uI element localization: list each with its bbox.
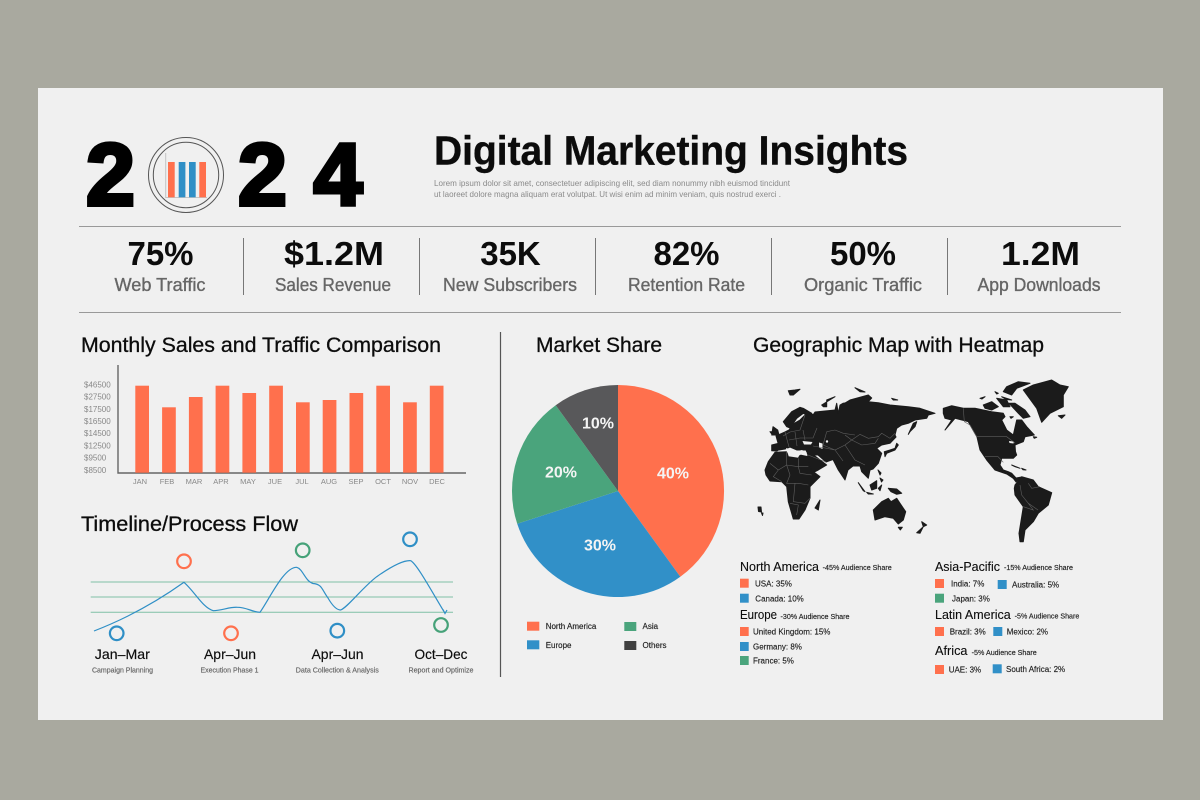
- map legend: Africa: Africa: [935, 644, 968, 658]
- KPI: organic traffic: [804, 235, 922, 295]
- phase 2 label: Execution Phase 1: [200, 668, 259, 674]
- bar chart: $12500: [84, 441, 111, 450]
- map legend: Africa: UAE: 3%: [949, 665, 981, 674]
- country borders: Eurasia: [783, 415, 895, 465]
- bar chart: [84, 365, 466, 486]
- pie chart: 30%: [584, 538, 616, 554]
- KPI: new subscribers: [443, 235, 577, 295]
- slice: North America 40%: [618, 385, 724, 577]
- bar chart: $14500: [84, 429, 111, 438]
- Arabia: [808, 455, 827, 473]
- bar chart: APR: [213, 477, 229, 486]
- map legend: Africa: [935, 644, 1065, 674]
- New Zealand and Tasmania: [898, 522, 927, 533]
- KPI: organic traffic: Organic Traffic: [804, 275, 922, 295]
- timeline chart: [91, 532, 474, 674]
- Scandinavia: [783, 407, 812, 428]
- heading: market share: Market Share: [536, 334, 662, 357]
- KPI: app downloads: App Downloads: [978, 275, 1100, 295]
- title: Digital Marketing Insights: [434, 128, 908, 174]
- slice: Europe 30%: [517, 491, 680, 597]
- Eurasia: [776, 395, 935, 480]
- heading: monthly sales: Monthly Sales and Traffic Comparison: [81, 334, 441, 357]
- KPI: sales revenue: [275, 235, 391, 295]
- timeline markers: [110, 532, 448, 640]
- icon: circled bar chart: [148, 138, 224, 212]
- map legend: Latin America: Latin America: [935, 608, 1011, 622]
- inland seas: [786, 440, 1014, 456]
- year heading 2024: 4: [314, 125, 362, 224]
- pie legend: Asia: [642, 622, 659, 631]
- heading: geographic map: Geographic Map with Heatmap: [753, 334, 1044, 357]
- KPI: web traffic: 75%: [127, 235, 194, 272]
- intro text: Lorem ipsum dolor sit amet, consectetuer adipiscing elit, sed diam nonummy nibh euismod tincidunt: [434, 178, 791, 188]
- center divider: [500, 332, 502, 677]
- bar chart: JUE: [268, 477, 282, 486]
- bar chart: $9500: [84, 454, 107, 463]
- bar chart: $46500: [84, 380, 111, 390]
- pie legend: Europe: [546, 641, 572, 650]
- year heading 2024: [86, 125, 362, 224]
- map legend: Asia-Pacific: India: 7%: [951, 580, 984, 588]
- pie chart: 20%: [545, 464, 577, 482]
- KPI: retention rate: [628, 235, 745, 295]
- Iberia: [772, 443, 780, 451]
- pie chart: 40%: [657, 466, 689, 482]
- year heading 2024: 2: [238, 125, 287, 224]
- map legend: North America: North America: [740, 560, 819, 574]
- old-world islands: [758, 388, 917, 516]
- pie legend: North America: [546, 622, 597, 631]
- phase 2 label: [200, 646, 259, 674]
- KPI: retention rate: 82%: [653, 235, 720, 272]
- South America: [1014, 477, 1052, 542]
- map legend: North America: Canada: 10%: [755, 594, 804, 603]
- map legend: Europe: Germany: 8%: [753, 642, 802, 651]
- Australia: [873, 498, 906, 524]
- phase 1 label: Jan–Mar: [95, 646, 150, 662]
- bar chart: MAR: [186, 477, 203, 486]
- pie legend: Others: [642, 641, 667, 650]
- intro text: ut laoreet dolore magna aliquam erat volutpat. Ut wisi enim ad minim veniam, quis nostrud exerci .: [434, 189, 781, 199]
- pie chart: 10%: [582, 416, 614, 432]
- KPI: sales revenue: Sales Revenue: [275, 275, 391, 295]
- map legend: Asia-Pacific: [935, 560, 1073, 603]
- map legend: Latin America: Mexico: 2%: [1007, 627, 1048, 636]
- bar chart: MAY: [240, 477, 256, 486]
- KPI: new subscribers: New Subscribers: [443, 275, 577, 295]
- North Atlantic island: [1058, 415, 1065, 418]
- slice: Others 10%: [556, 385, 618, 491]
- map legend: Asia-Pacific: Japan: 3%: [952, 594, 990, 603]
- year heading 2024: 2: [86, 125, 135, 224]
- map legend: Europe: [740, 608, 850, 665]
- Caribbean: [1012, 465, 1026, 470]
- map legend: Europe: France: 5%: [753, 656, 794, 665]
- map legend: Europe: Europe: [740, 608, 777, 622]
- map legend: Europe: United Kingdom: 15%: [753, 627, 830, 636]
- phase 4 label: Report and Optimize: [408, 668, 474, 674]
- phase 1 label: [92, 646, 153, 674]
- phase 3 label: [296, 646, 379, 674]
- KPI: app downloads: 1.2M: [1001, 235, 1080, 272]
- bar chart: $16500: [84, 417, 111, 426]
- KPI: retention rate: Retention Rate: [628, 275, 745, 295]
- KPI: new subscribers: 35K: [480, 235, 541, 272]
- slice: Asia 20%: [512, 405, 618, 524]
- bar chart: FEB: [160, 477, 174, 486]
- country borders: Africa: [770, 452, 812, 515]
- phase 4 label: Oct–Dec: [414, 646, 468, 662]
- map legend: Africa: South Africa: 2%: [1006, 665, 1065, 674]
- Central America link: [1012, 473, 1022, 482]
- Greenland: [1023, 380, 1068, 422]
- line: process curve: [94, 561, 447, 631]
- KPI strip: [79, 226, 1121, 312]
- map legend: North America: [740, 560, 892, 603]
- bar chart: $8500: [84, 466, 107, 475]
- map legend: Asia-Pacific: -15% Audience Share: [1004, 565, 1073, 572]
- map legend: Europe: -30% Audience Share: [780, 614, 850, 621]
- bar chart: $27500: [84, 393, 111, 402]
- bar chart: OCT: [375, 477, 391, 486]
- phase 3 label: Data Collection & Analysis: [296, 668, 379, 674]
- pie legend: [527, 622, 667, 650]
- map legend: Latin America: -5% Audience Share: [1015, 614, 1079, 620]
- map legend: Latin America: [935, 608, 1079, 636]
- Africa: [765, 452, 820, 519]
- map legend: North America: -45% Audience Share: [823, 565, 892, 572]
- pie chart: [512, 385, 724, 597]
- map legend: Latin America: Brazil: 3%: [950, 627, 986, 636]
- Arctic islands: [980, 382, 1037, 438]
- North America: [943, 406, 1034, 478]
- bar chart: AUG: [321, 477, 337, 486]
- KPI: organic traffic: 50%: [830, 235, 896, 272]
- bar chart: SEP: [348, 477, 364, 486]
- heading: timeline: Timeline/Process Flow: [81, 513, 299, 536]
- bar chart: $17500: [84, 405, 111, 414]
- map legend: Africa: -5% Audience Share: [972, 650, 1037, 657]
- map legend: Asia-Pacific: Asia-Pacific: [935, 560, 1000, 574]
- Southeast Asia islands: [858, 470, 902, 494]
- bar chart: NOV: [402, 477, 418, 486]
- phase 4 label: [408, 646, 474, 674]
- KPI: web traffic: Web Traffic: [114, 275, 206, 295]
- KPI: app downloads: [978, 235, 1100, 295]
- bar chart: JAN: [133, 477, 147, 486]
- map legend: Asia-Pacific: Australia: 5%: [1012, 580, 1059, 589]
- map legend: North America: USA: 35%: [755, 579, 792, 588]
- phase 1 label: Campaign Planning: [92, 668, 153, 674]
- bar chart: DEC: [429, 477, 445, 486]
- background panel: [38, 88, 1163, 720]
- world map: [758, 380, 1068, 542]
- phase 2 label: Apr–Jun: [204, 646, 256, 662]
- country borders: Americas: [963, 408, 1040, 510]
- intro text: [434, 178, 791, 199]
- KPI: web traffic: [114, 235, 206, 295]
- phase 3 label: Apr–Jun: [312, 646, 364, 662]
- KPI: sales revenue: $1.2M: [284, 235, 384, 272]
- bar chart: JUL: [295, 477, 309, 486]
